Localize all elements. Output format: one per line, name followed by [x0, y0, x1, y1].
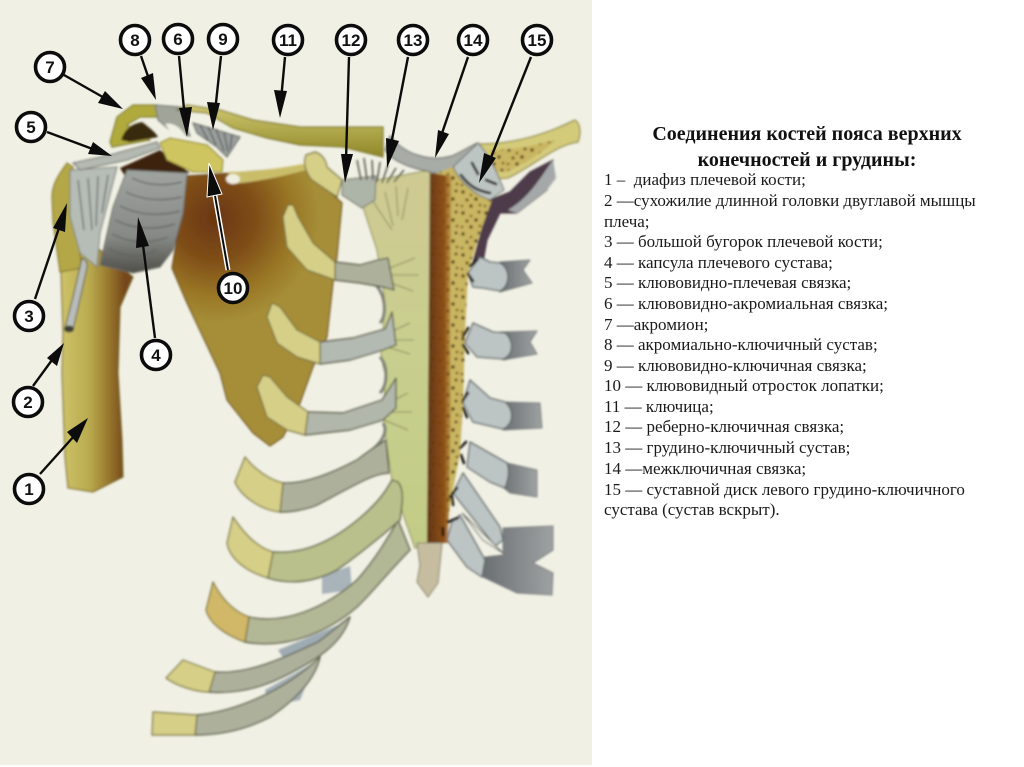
scalloped borders	[363, 283, 386, 457]
marker 7: 7	[45, 58, 55, 77]
rib 5	[280, 440, 389, 512]
marker 9	[208, 24, 238, 54]
arrow 1	[40, 418, 88, 474]
legend text: 14 —межключичная связка;	[604, 459, 806, 478]
legend text	[604, 170, 976, 519]
left ribs	[152, 152, 410, 735]
background panel	[0, 0, 592, 765]
rib 1	[305, 152, 342, 197]
legend text: 10 — клювовидный отросток лопатки;	[604, 376, 884, 395]
numbered markers	[14, 24, 552, 504]
humeral head	[52, 163, 82, 272]
right ribs 6-7	[483, 526, 553, 595]
right rib 3	[500, 331, 537, 360]
legend text: 1 – диафиз плечевой кости;	[604, 170, 806, 189]
rib 8	[209, 617, 350, 692]
legend text: 11 — ключица;	[604, 397, 714, 416]
costoclavicular ligament	[342, 176, 376, 208]
sternum fibre fans	[372, 186, 419, 430]
legend text: 8 — акромиально-ключичный сустав;	[604, 335, 878, 354]
legend text: 12 — реберно-ключичная связка;	[604, 417, 844, 436]
biceps tendon	[65, 258, 87, 330]
arrow 11	[274, 57, 287, 118]
scapula spine edge	[228, 164, 306, 184]
xiphoid process	[417, 543, 442, 597]
ligament between ribs 6-7	[322, 566, 352, 594]
marker 3	[14, 302, 44, 330]
rib 7	[245, 520, 410, 644]
arrow 13	[386, 57, 408, 168]
title	[652, 123, 962, 171]
ligaments lower ribs	[278, 620, 350, 668]
marker 5: 5	[26, 118, 36, 137]
marker 2: 2	[23, 393, 33, 412]
rib 2	[335, 258, 394, 290]
rib 4	[305, 378, 396, 435]
legend text: 9 — клювовидно-ключичная связка;	[604, 356, 867, 375]
left sternum half	[363, 170, 430, 548]
arrow 3	[35, 203, 67, 299]
arrow 6	[179, 56, 192, 137]
legend text: 15 — суставной диск левого грудино-ключичного	[604, 480, 965, 499]
legend text: 3 — большой бугорок плечевой кости;	[604, 232, 883, 251]
marker 2	[14, 388, 42, 416]
articular disc	[453, 143, 504, 200]
humerus	[60, 240, 133, 492]
arrows	[33, 56, 531, 474]
legend text: 13 — грудино-ключичный сустав;	[604, 438, 850, 457]
marker 14: 14	[464, 31, 483, 50]
marker 13	[398, 26, 428, 54]
sternum cortical edge	[427, 173, 452, 543]
arrow 14	[435, 57, 468, 158]
legend text: 7 —акромион;	[604, 315, 708, 334]
legend text: 2 —сухожилие длинной головки двуглавой мышцы	[604, 191, 976, 210]
marker 1	[14, 474, 44, 504]
marker 7	[36, 52, 64, 82]
coracohumeral ligament	[73, 142, 160, 170]
legend text: плеча;	[604, 212, 650, 231]
arrow 12	[341, 57, 353, 183]
anatomical illustration	[52, 105, 580, 735]
marker 4	[142, 340, 170, 370]
marker 11	[274, 26, 302, 54]
rib 3	[320, 312, 396, 364]
title: конечностей и грудины:	[698, 149, 916, 171]
arrow 2	[33, 343, 64, 386]
dark recess	[120, 150, 190, 176]
rib 9	[195, 657, 320, 735]
arrow 10	[207, 163, 228, 270]
right rib 2	[500, 260, 532, 292]
marker 15	[522, 26, 552, 54]
marker 6	[164, 24, 192, 54]
marker 11: 11	[279, 31, 297, 50]
right ribs	[447, 257, 553, 595]
arrow 9	[207, 56, 221, 130]
marker 6: 6	[173, 30, 183, 49]
marker 1: 1	[24, 480, 34, 499]
coracoid process	[160, 138, 223, 172]
marker 8	[120, 26, 150, 54]
marker 4: 4	[151, 346, 161, 365]
marker 12	[336, 26, 366, 54]
marker 14	[458, 26, 488, 54]
marker 10	[218, 274, 248, 302]
marker 9: 9	[218, 30, 228, 49]
acromion	[110, 105, 157, 147]
rib 6	[268, 480, 402, 582]
arrow 4	[136, 217, 155, 338]
marker 13: 13	[404, 31, 422, 50]
interclavicular ligament	[385, 136, 490, 174]
sternum spongy section	[427, 167, 492, 543]
legend text: 4 — капсула плечевого сустава;	[604, 253, 833, 272]
shoulder capsule	[70, 167, 187, 273]
arrow 8	[141, 56, 156, 100]
right clavicle	[475, 120, 580, 180]
coracoacromial ligament	[155, 105, 190, 136]
marker 12: 12	[342, 31, 360, 50]
legend text: 6 — клювовидно-акромиальная связка;	[604, 294, 888, 313]
sternum suture marks	[443, 260, 477, 535]
marker 8: 8	[130, 31, 140, 50]
marker 3: 3	[24, 307, 34, 326]
coracoclavicular ligament	[193, 123, 240, 157]
arrow 7	[64, 75, 123, 109]
title: Соединения костей пояса верхних	[652, 123, 962, 145]
right rib 5	[500, 463, 537, 497]
right rib 4	[503, 402, 542, 430]
legend text: сустава (сустав вскрыт).	[604, 500, 780, 519]
marker 10: 10	[224, 279, 242, 298]
arrow 5	[47, 132, 112, 156]
arrow 15	[479, 57, 531, 183]
scapula	[172, 167, 342, 446]
marker 5	[16, 112, 46, 142]
clavicle	[177, 105, 383, 157]
right first rib	[473, 160, 553, 262]
legend text: 5 — клювовидно-плечевая связка;	[604, 273, 851, 292]
marker 15: 15	[528, 31, 546, 50]
